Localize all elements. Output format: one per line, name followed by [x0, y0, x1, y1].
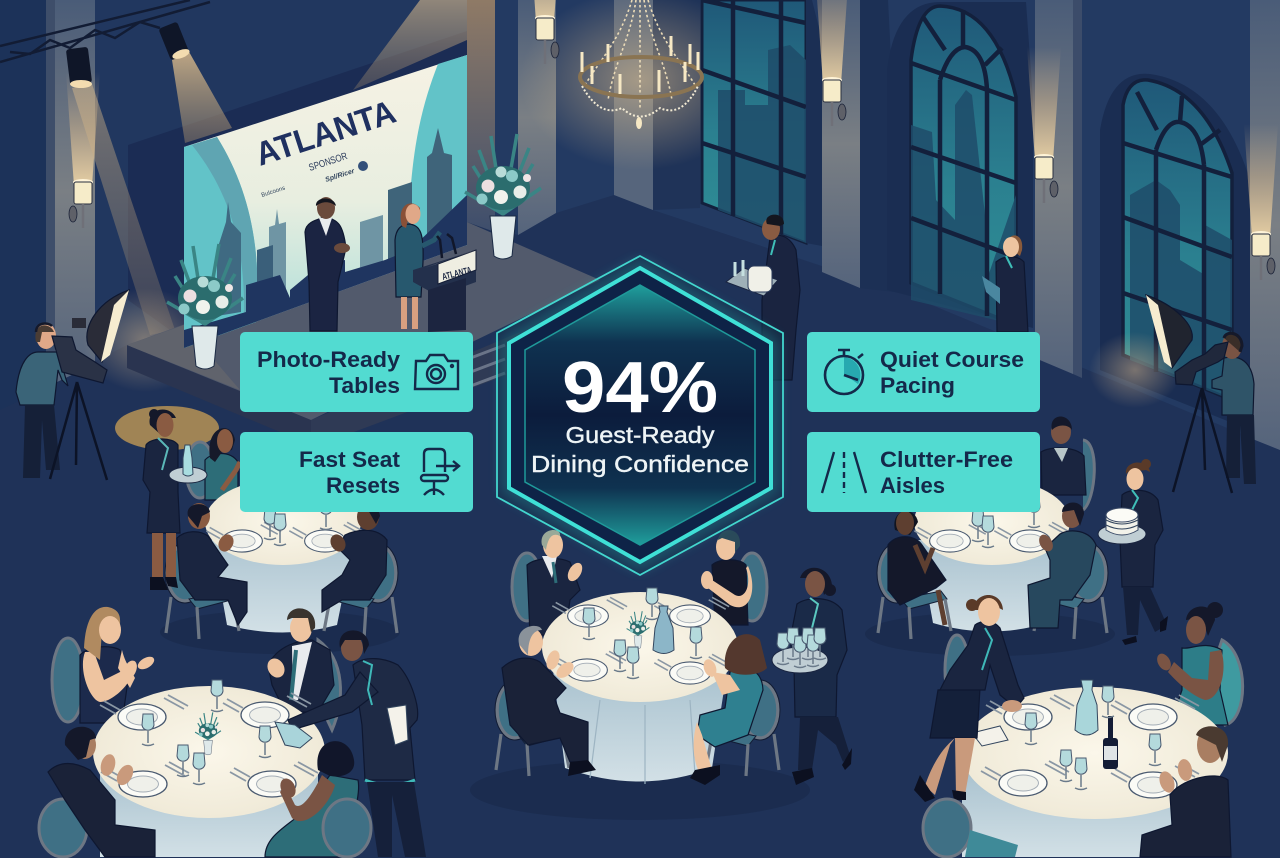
upper left table group: [160, 428, 400, 654]
guest: woman in teal: [205, 428, 240, 500]
backdrop skyline: [184, 128, 467, 348]
icon: aisle lines: [822, 452, 866, 493]
bottom left server pouring: [275, 630, 426, 857]
guest: blond woman: [80, 607, 156, 723]
softbox light left: [72, 290, 129, 362]
guest: man upper right: [1041, 416, 1086, 495]
panel: Quiet Course Pacing: Pacing: [880, 373, 955, 398]
bottom right table group: [945, 602, 1243, 857]
wall sconces: [66, 0, 1278, 280]
softbox light right: [1089, 295, 1192, 408]
panel: Fast Seat Resets: Fast Seat: [299, 447, 401, 472]
bottom right server bending: [914, 595, 1024, 802]
guest: man right: [322, 504, 387, 612]
left server with carafe tray: [143, 409, 207, 590]
centre table group: [470, 530, 810, 820]
window centre: [887, 2, 1033, 328]
back waiter with plates: [726, 215, 800, 380]
centre server with glass tray: [772, 568, 852, 785]
guest: man upper left: [527, 530, 585, 635]
guest: man front left: [39, 727, 155, 857]
backdrop title: ATLANTA: [251, 93, 400, 173]
guest: man left: [177, 503, 247, 625]
podium label: ATLANTA: [441, 265, 473, 283]
chandelier: [580, 0, 702, 129]
speaker man: [305, 197, 350, 331]
flower arrangement left: [167, 244, 243, 369]
guest: man front right: [1140, 726, 1231, 857]
headline caption line 1: Guest-Ready: [566, 422, 715, 448]
icon: stopwatch: [825, 350, 863, 394]
back wall: right with piers: [467, 0, 1280, 450]
guest: woman lower right: [690, 634, 767, 785]
panel: Clutter-Free Aisles: [807, 432, 1040, 512]
guest: woman front right: [265, 741, 371, 857]
bottom left table group: [52, 607, 340, 857]
stage platform: [127, 222, 600, 448]
camera operator left: [16, 323, 107, 480]
sponsor backdrop: [184, 55, 467, 348]
upper right table group: [865, 416, 1115, 656]
lighting truss and spotlights: [0, 0, 467, 335]
back wall: left with pier: [0, 0, 470, 410]
panel: Photo-Ready Tables: Tables: [329, 373, 400, 398]
sponsor logo left: Bulcoons: [261, 186, 286, 199]
guest: man lower left: [502, 626, 596, 776]
sponsor logo marks: [324, 161, 368, 184]
window left: [702, 0, 822, 246]
window right: [1100, 74, 1250, 430]
panel: Fast Seat Resets: Resets: [326, 473, 400, 498]
camera operator right: [1173, 333, 1256, 493]
guest: woman in teal dress: [1154, 602, 1228, 725]
icon: camera: [415, 355, 458, 389]
podium: [413, 234, 476, 332]
panel: Photo-Ready Tables: Photo-Ready: [257, 347, 401, 372]
sponsor logo marks: Spl/Ricer: [324, 167, 357, 184]
floor light pool: [115, 406, 219, 450]
panel: Clutter-Free Aisles: Clutter-Free: [880, 447, 1013, 472]
back staff with clipboard: [982, 235, 1028, 332]
backdrop sponsor label: SPONSOR: [308, 151, 349, 174]
headline figure: 94%: [562, 348, 718, 428]
chandelier glow: [520, 0, 760, 170]
flower arrangement right: [465, 134, 541, 259]
panel: Photo-Ready Tables: [240, 332, 473, 412]
headline caption line 2: Dining Confidence: [531, 451, 749, 477]
panel: Quiet Course Pacing: Quiet Course: [880, 347, 1024, 372]
speaker woman: [395, 203, 440, 329]
panel: Clutter-Free Aisles: Aisles: [880, 473, 945, 498]
guest: woman left: [888, 511, 946, 625]
panel: Fast Seat Resets: [240, 432, 473, 512]
panel: Quiet Course Pacing: [807, 332, 1040, 412]
hexagon glow: [509, 268, 771, 562]
guest: woman upper right: [701, 530, 752, 625]
softbox glow left: [83, 288, 207, 392]
central hexagon badge: [497, 256, 783, 575]
icon: chair with arrow: [421, 449, 459, 495]
guest: man lower right: [1028, 502, 1096, 628]
front right chair: [923, 799, 1018, 857]
right server with plate stack: [1098, 459, 1168, 645]
guest: man in suit: [264, 608, 334, 712]
